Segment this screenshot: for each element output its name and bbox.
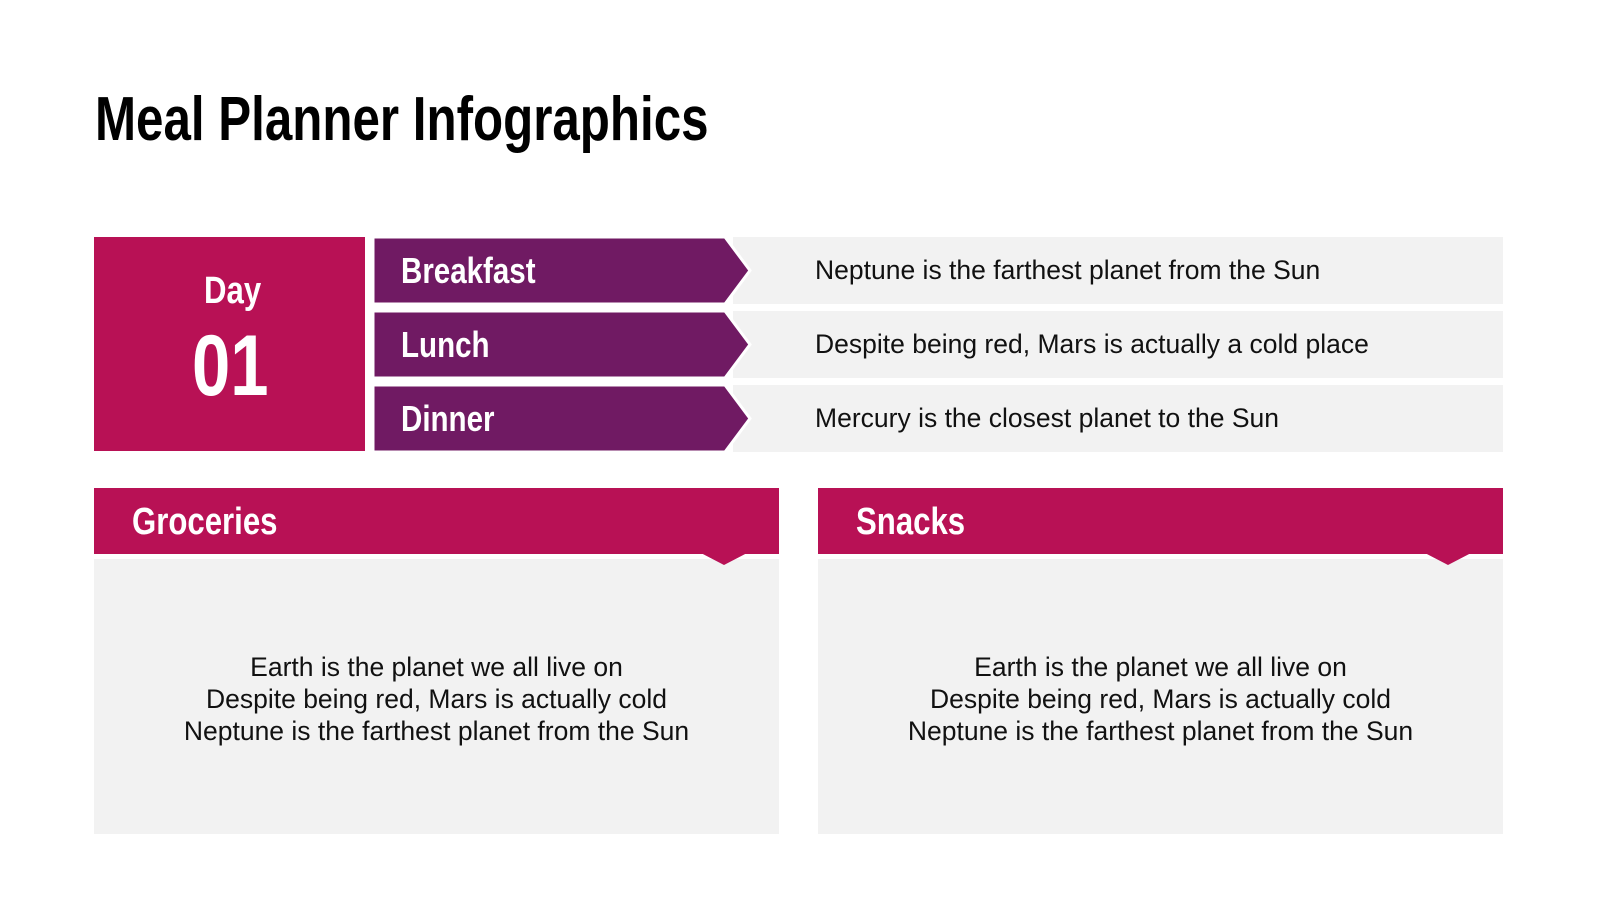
panel: groceries: Despite being red, Mars is actually cold — [206, 684, 667, 714]
panel: snacks: Despite being red, Mars is actually cold — [930, 684, 1391, 714]
row: lunch: Despite being red, Mars is actually a cold place — [815, 329, 1369, 359]
panel: snacks: Earth is the planet we all live on — [974, 652, 1347, 682]
panel: snacks — [818, 488, 1503, 834]
row: breakfast — [374, 237, 1503, 304]
row: breakfast: Breakfast — [401, 250, 536, 291]
title: Meal Planner Infographics — [95, 85, 709, 154]
panel: groceries: Neptune is the farthest planet from the Sun — [184, 716, 689, 746]
day box: Day — [204, 270, 261, 312]
day box — [94, 237, 365, 451]
panel: groceries — [94, 488, 779, 834]
panel: snacks: Snacks — [856, 501, 965, 543]
day box: 01 — [192, 318, 269, 414]
panel: snacks: Neptune is the farthest planet from the Sun — [908, 716, 1413, 746]
row: dinner — [374, 385, 1503, 452]
row: lunch — [374, 311, 1503, 378]
panel: groceries: Earth is the planet we all live on — [250, 652, 623, 682]
row: dinner: Dinner — [401, 398, 494, 439]
row: dinner: Mercury is the closest planet to the Sun — [815, 403, 1279, 433]
row: lunch: Lunch — [401, 324, 490, 365]
panel: groceries: Groceries — [132, 501, 278, 543]
row: breakfast: Neptune is the farthest planet from the Sun — [815, 255, 1320, 285]
